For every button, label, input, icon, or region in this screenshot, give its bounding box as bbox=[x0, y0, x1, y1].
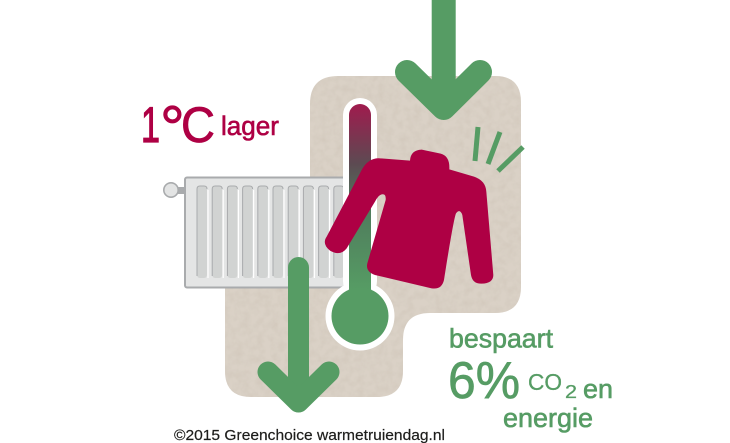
lager: lager bbox=[221, 111, 279, 141]
text: savings bbox=[448, 324, 613, 433]
bespaart: bespaart bbox=[449, 324, 553, 354]
thermometer bulb bbox=[332, 288, 388, 344]
en: en bbox=[583, 374, 613, 404]
icon: radiator bbox=[164, 178, 350, 288]
thermometer white outline bbox=[326, 98, 394, 350]
beige background shape bbox=[225, 76, 521, 397]
heading: 1°C lager bbox=[141, 94, 279, 163]
arrow: bottom down arrow bbox=[268, 268, 329, 402]
degree sign: ° bbox=[160, 94, 185, 163]
subscript 2: 2 bbox=[565, 382, 577, 402]
energie: energie bbox=[503, 403, 593, 433]
C: C bbox=[181, 97, 215, 153]
radiator body bbox=[185, 178, 350, 288]
radiator valve bbox=[164, 183, 185, 197]
CO: CO bbox=[528, 369, 562, 395]
radiator fins bbox=[197, 186, 345, 278]
thermometer tube bbox=[349, 104, 371, 304]
icon: sweater bbox=[325, 150, 493, 289]
arrow: top down arrow bbox=[407, 0, 480, 108]
icon: warmth marks bbox=[475, 127, 523, 171]
6%: 6% bbox=[448, 352, 520, 410]
icon: thermometer bbox=[326, 98, 394, 350]
1: 1 bbox=[141, 97, 160, 153]
